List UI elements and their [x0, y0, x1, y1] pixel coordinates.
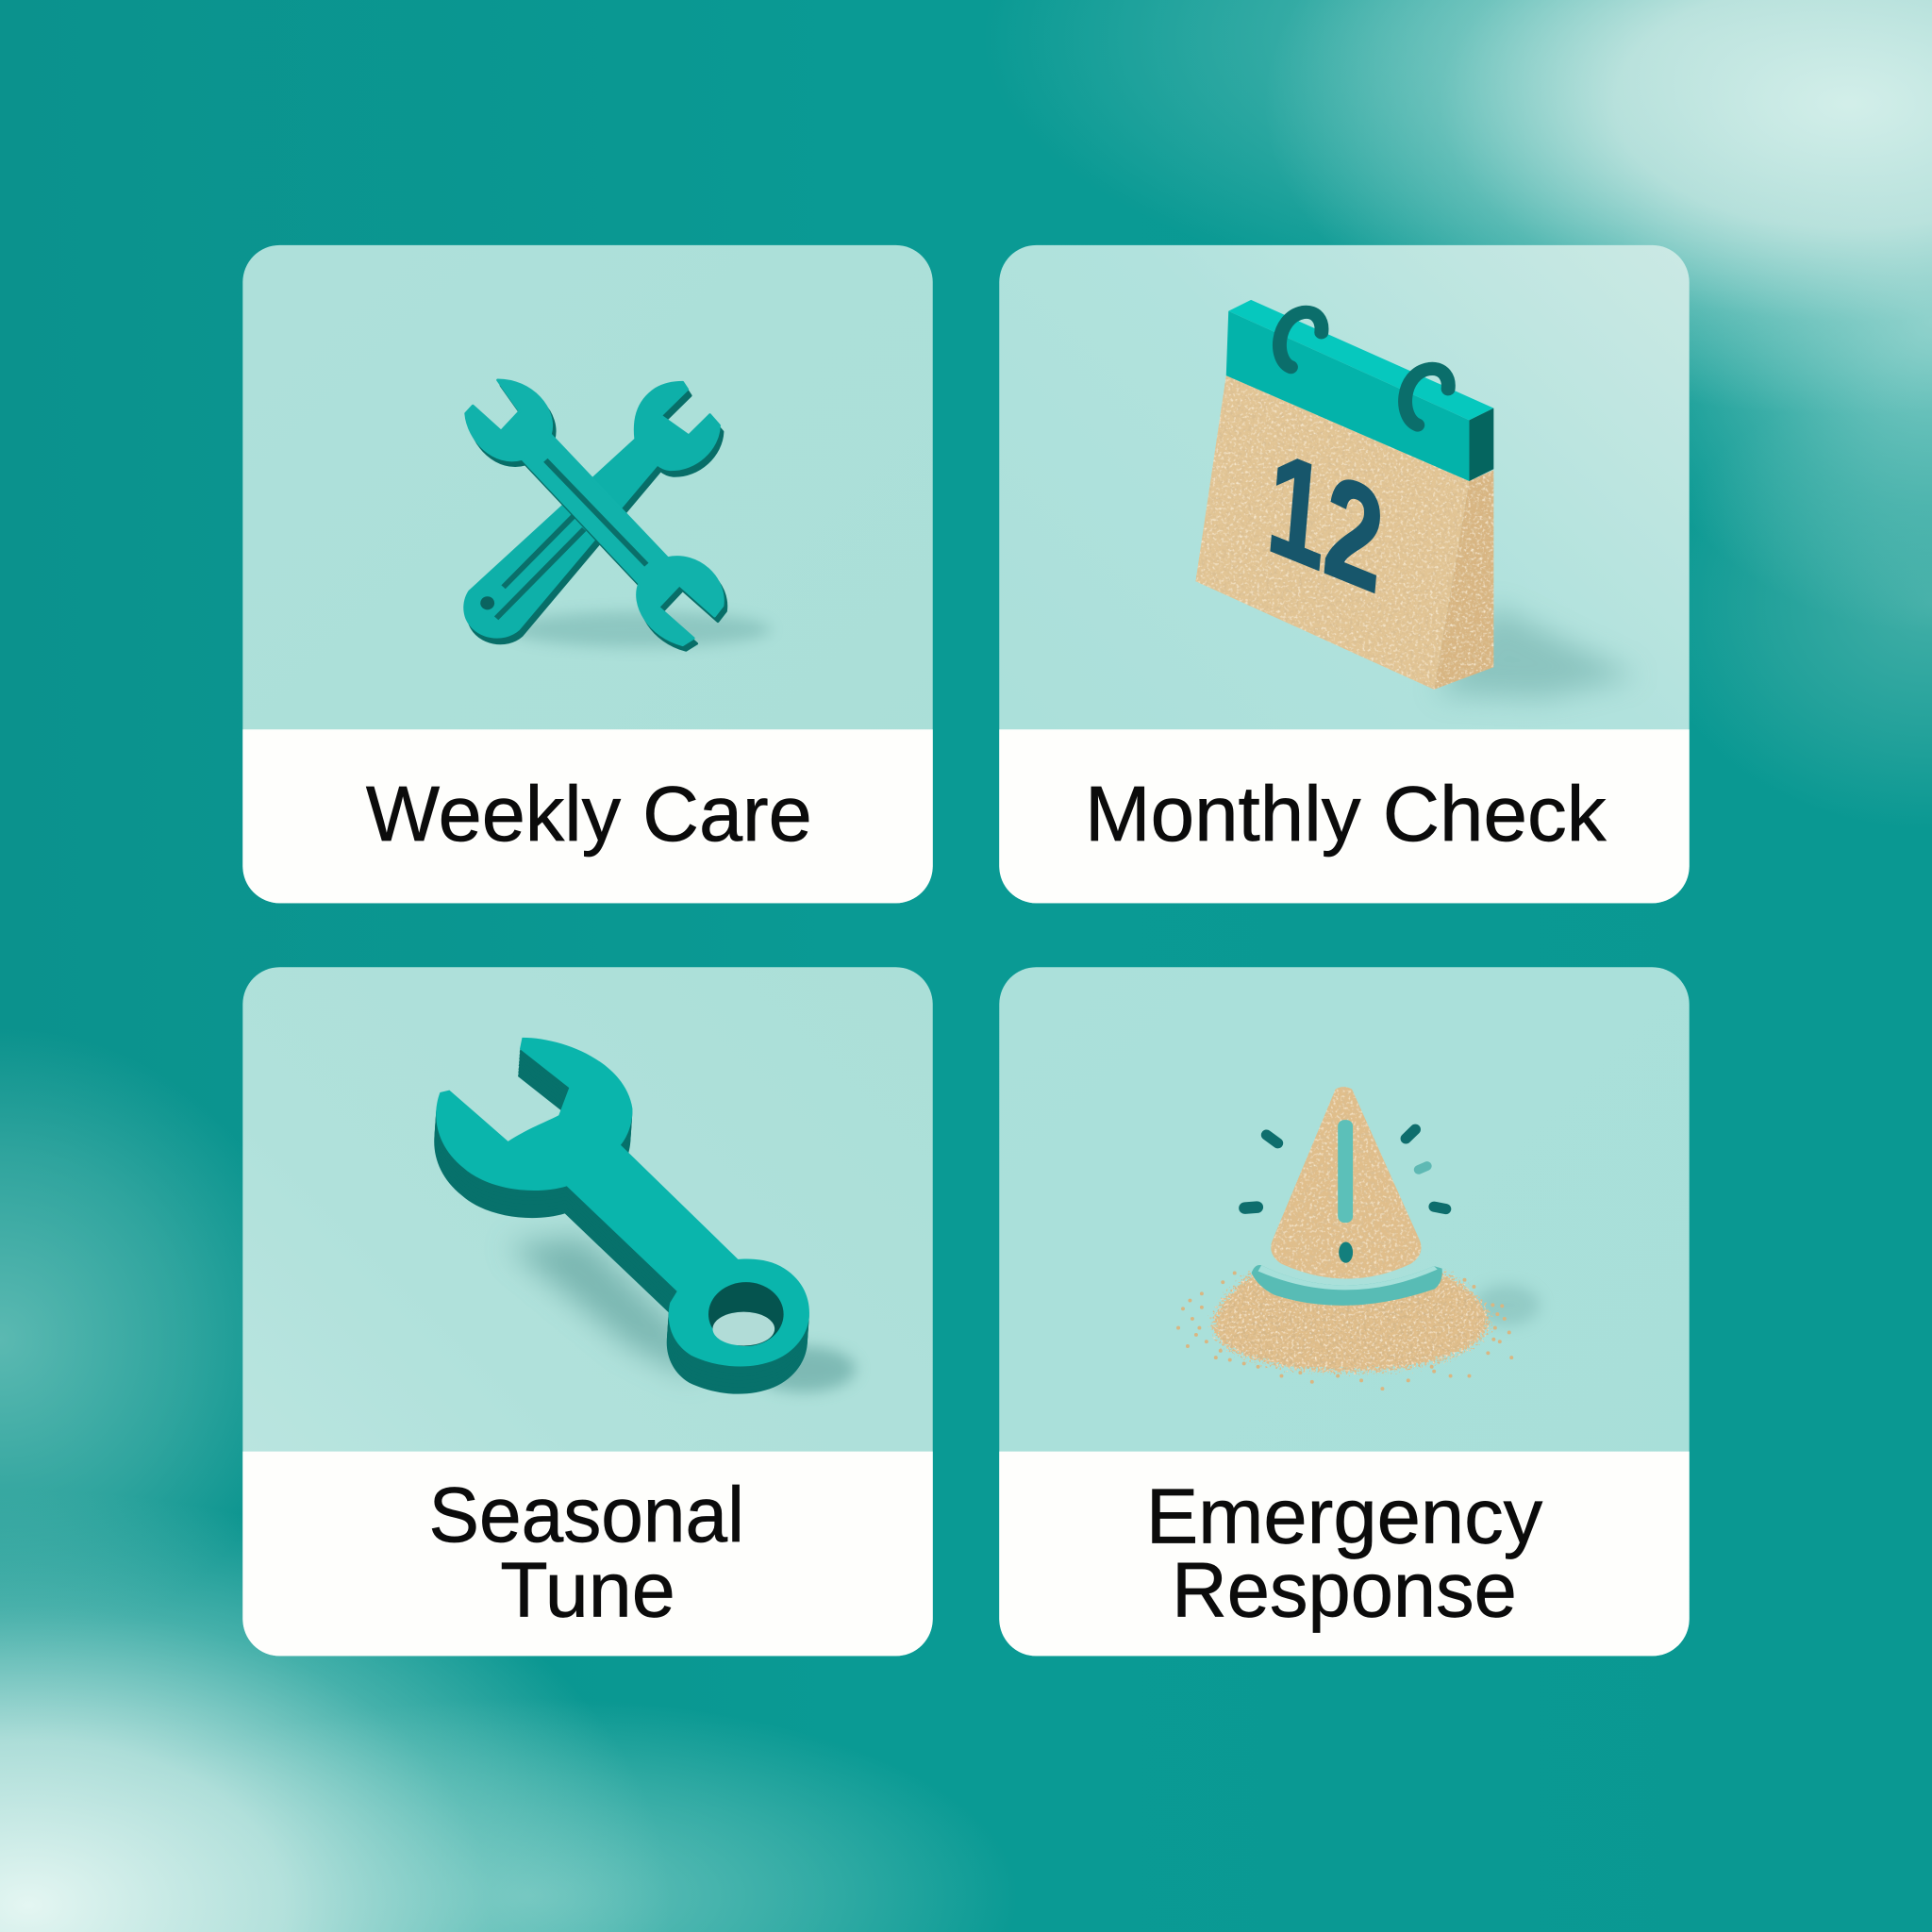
icon: crossed wrenches [465, 380, 771, 650]
label: Emergency [1146, 1472, 1543, 1559]
panel: emergency response [999, 967, 1690, 1656]
icon: large wrench [434, 1038, 856, 1394]
panel: monthly check [999, 245, 1690, 903]
label: Monthly Check [1085, 770, 1607, 858]
icon: sand calendar with teal header [1195, 300, 1639, 698]
label: Seasonal [429, 1471, 744, 1558]
panel: seasonal tune [242, 967, 933, 1656]
label line 2: Response [1172, 1546, 1517, 1634]
date number: 12 [1262, 420, 1389, 625]
icon: sand warning cone [1178, 1087, 1540, 1389]
panel: weekly care [242, 245, 933, 903]
label line 2: Tune [500, 1546, 675, 1634]
label: Weekly Care [366, 770, 812, 858]
